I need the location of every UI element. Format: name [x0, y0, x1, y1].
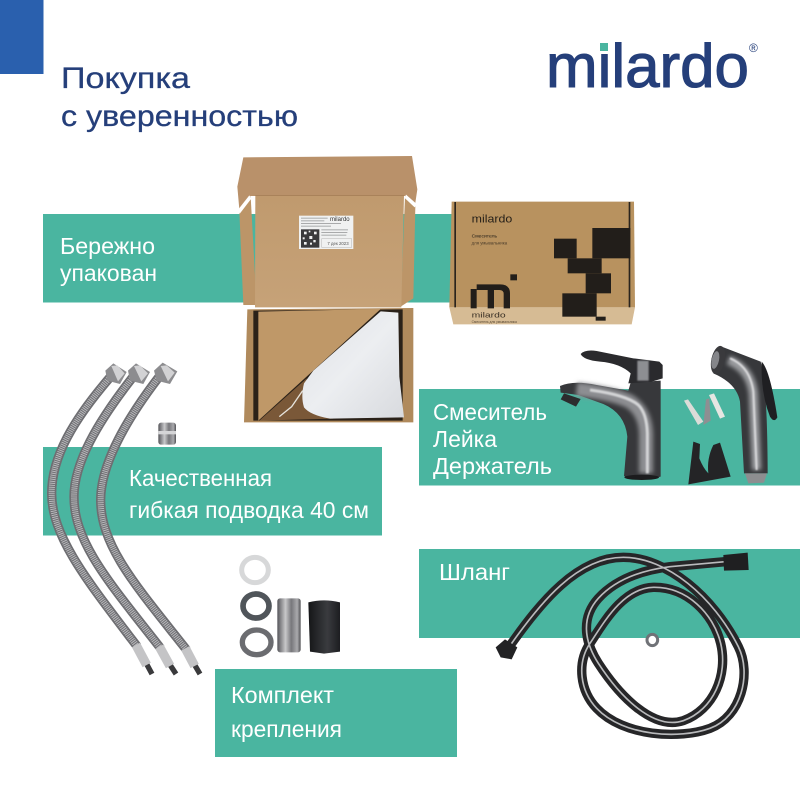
panel: flexible connection hoses	[43, 447, 382, 536]
steel sleeve	[277, 598, 301, 652]
panel: flexible connection hoses: гибкая подводка 40 см	[129, 497, 369, 523]
small hose washer	[647, 634, 658, 646]
title: Покупка	[61, 62, 190, 95]
closed product box: для умывальника	[472, 241, 508, 246]
panel: faucet, shower head, holder: Смеситель	[433, 399, 547, 425]
panel: hose: Шланг	[439, 559, 510, 585]
closed product box: Смеситель	[472, 234, 497, 240]
blue corner block	[0, 0, 44, 74]
shipping label with QR code: milardo	[330, 217, 350, 223]
logo: milardo: milardo	[546, 32, 749, 100]
metal ring	[242, 630, 271, 655]
black pixel pattern	[554, 228, 630, 321]
shower head	[708, 345, 777, 483]
rubber gasket	[243, 594, 269, 618]
closed product box: Смеситель для умывальника	[472, 320, 517, 324]
panel: hose	[419, 549, 800, 638]
panel: mounting kit: Комплект	[231, 682, 334, 708]
panel: carefully packed: Бережно	[60, 233, 155, 259]
flexible braided hoses	[52, 363, 200, 674]
faucet	[560, 351, 663, 480]
black nut	[308, 600, 340, 654]
panel: mounting kit	[215, 669, 457, 757]
panel: faucet, shower head, holder: Держатель	[433, 453, 552, 479]
holder and wall plugs	[684, 393, 731, 484]
hose nut connector	[496, 639, 517, 659]
hose 1	[52, 377, 152, 674]
shower hose	[512, 557, 744, 734]
adapter nipple	[158, 423, 176, 445]
brand m mark	[471, 274, 517, 308]
open cardboard box	[237, 156, 417, 422]
hose 3	[101, 377, 200, 674]
clear washer	[242, 557, 268, 583]
closed product box: milardo	[472, 310, 506, 319]
title	[61, 62, 298, 133]
panel: flexible connection hoses: Качественная	[129, 465, 272, 491]
hose end connector	[723, 553, 749, 571]
closed product box	[449, 202, 635, 324]
panel: faucet, shower head, holder: Лейка	[433, 426, 497, 452]
hose 2	[74, 377, 176, 674]
closed product box: milardo	[472, 214, 512, 226]
panel: faucet, shower head, holder	[419, 389, 800, 486]
shipping label with QR code: 7 дек 2023	[327, 241, 349, 246]
mounting kit parts	[242, 557, 340, 655]
logo: milardo: ®	[749, 41, 758, 55]
title: с уверенностью	[61, 100, 298, 133]
panel: mounting kit: крепления	[231, 716, 342, 742]
panel: carefully packed: упакован	[60, 260, 157, 286]
shipping label with QR code	[299, 216, 353, 249]
panel: carefully packed	[43, 214, 452, 302]
